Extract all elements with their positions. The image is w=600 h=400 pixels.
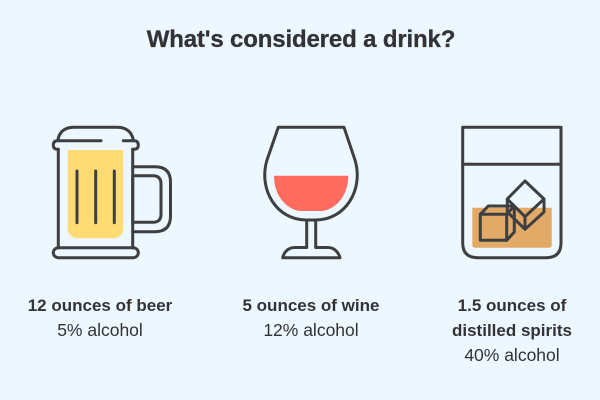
label: spirits: distilled spirits	[452, 321, 572, 340]
label: spirits	[452, 296, 572, 365]
title: What's considered a drink?	[147, 26, 455, 53]
label: spirits: 40% alcohol	[464, 345, 560, 365]
label: wine: 12% alcohol	[263, 320, 359, 340]
label: beer	[28, 296, 172, 340]
label: beer: 12 ounces of beer	[28, 296, 172, 315]
label: wine: 5 ounces of wine	[242, 296, 379, 315]
icon: wine glass	[265, 127, 357, 258]
label: wine	[242, 296, 379, 340]
icon: glass of spirits with ice	[463, 127, 561, 258]
label: beer: 5% alcohol	[57, 320, 143, 340]
label: spirits: 1.5 ounces of	[458, 296, 566, 315]
icon: beer mug	[53, 127, 170, 258]
